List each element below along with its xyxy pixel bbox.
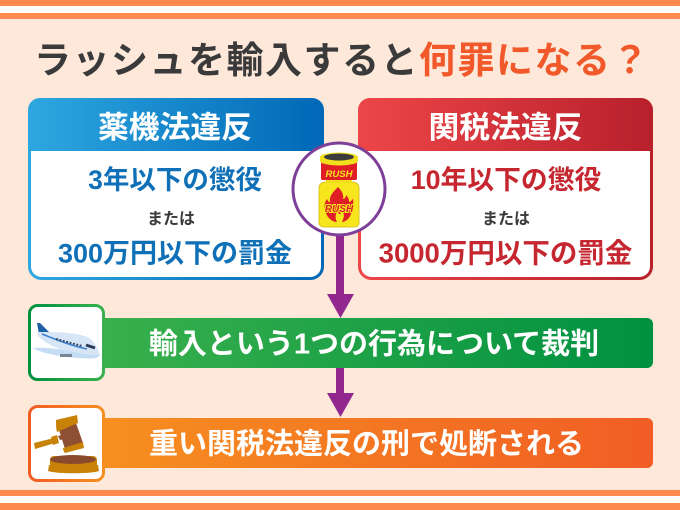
bar: 処断 xyxy=(104,418,653,468)
panel header: 薬機法違反 xyxy=(28,98,324,151)
panel: 薬機法違反: 3年以下の懲役 xyxy=(88,165,262,195)
title: ラッシュを輸入すると何罪になる？ xyxy=(34,40,650,81)
arrow: middle xyxy=(327,368,354,417)
icon: rush bottle: RUSH xyxy=(325,204,354,215)
panel: 関税法違反: 10年以下の懲役 xyxy=(411,165,601,195)
icon: rush bottle xyxy=(293,143,385,235)
panel: 薬機法違反: または xyxy=(147,210,195,228)
panel header: 関税法違反 xyxy=(358,98,653,151)
bar: 処断: 重い関税法違反の刑で処断される xyxy=(149,428,584,460)
panel: 薬機法違反 xyxy=(28,98,324,278)
bar: 輸入 xyxy=(104,318,653,368)
panel: 関税法違反: 3000万円以下の罰金 xyxy=(379,238,632,268)
icon: rush bottle: RUSH xyxy=(326,169,354,180)
panel: 関税法違反: または xyxy=(482,210,530,228)
panel: 関税法違反 xyxy=(358,98,653,278)
panel header: 関税法違反: 関税法違反 xyxy=(429,110,582,145)
bar: 輸入: 輸入という1つの行為について裁判 xyxy=(149,328,599,360)
panel: 薬機法違反: 300万円以下の罰金 xyxy=(58,238,292,268)
panel header: 薬機法違反: 薬機法違反 xyxy=(98,110,252,145)
icon: airplane xyxy=(30,306,104,380)
arrow: top xyxy=(327,234,354,318)
icon: gavel xyxy=(30,406,104,480)
